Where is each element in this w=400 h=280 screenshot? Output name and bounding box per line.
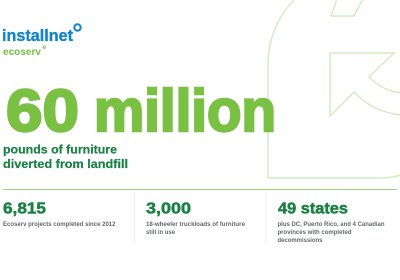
caption: provinces and territories xyxy=(278,222,385,244)
headline: 60 million: million xyxy=(94,78,276,144)
subheading: pounds of furniture diverted from landfill: pounds of furniture xyxy=(3,144,117,156)
headline: 60 million xyxy=(6,78,276,144)
stat: 3,000 truckloads xyxy=(146,200,246,236)
caption: truckloads of furniture: 18-wheeler truckloads of furniture xyxy=(146,222,246,228)
subheading: pounds of furniture diverted from landfill: diverted from landfill xyxy=(3,159,128,171)
stats top rule xyxy=(3,189,397,190)
logo wordmark: installnet: installnet xyxy=(2,27,73,45)
number: 6,815: 6,815 xyxy=(3,200,46,218)
subheading: pounds of furniture diverted from landfill xyxy=(3,144,128,171)
logo icon: blue ring xyxy=(74,24,81,31)
caption: truckloads of furniture xyxy=(146,222,246,236)
caption: truckloads of furniture: still in use xyxy=(146,230,176,236)
caption: provinces and territories: plus DC, Puerto Rico, and 4 Canadian xyxy=(278,222,385,228)
caption: provinces and territories: decommissions xyxy=(278,238,323,244)
headline: 60 million: 60 xyxy=(6,78,79,144)
logo: installnet ecoserv xyxy=(2,24,81,58)
stat: 6,815 projects xyxy=(3,200,116,228)
logo wordmark: ecoserv: ecoserv xyxy=(3,46,41,58)
stat divider one xyxy=(134,190,135,243)
stat divider two xyxy=(266,190,267,243)
stat: 49 states xyxy=(278,200,385,244)
number: 3,000: 3,000 xyxy=(146,200,191,218)
caption: projects completed: Ecoserv projects completed since 2012 xyxy=(3,222,116,228)
caption: provinces and territories: provinces with completed xyxy=(278,230,352,236)
logo mark: superscript e: e xyxy=(42,44,46,51)
watermark: recycling icon outline xyxy=(268,0,400,178)
number: 49 states: 49 states xyxy=(278,200,348,218)
